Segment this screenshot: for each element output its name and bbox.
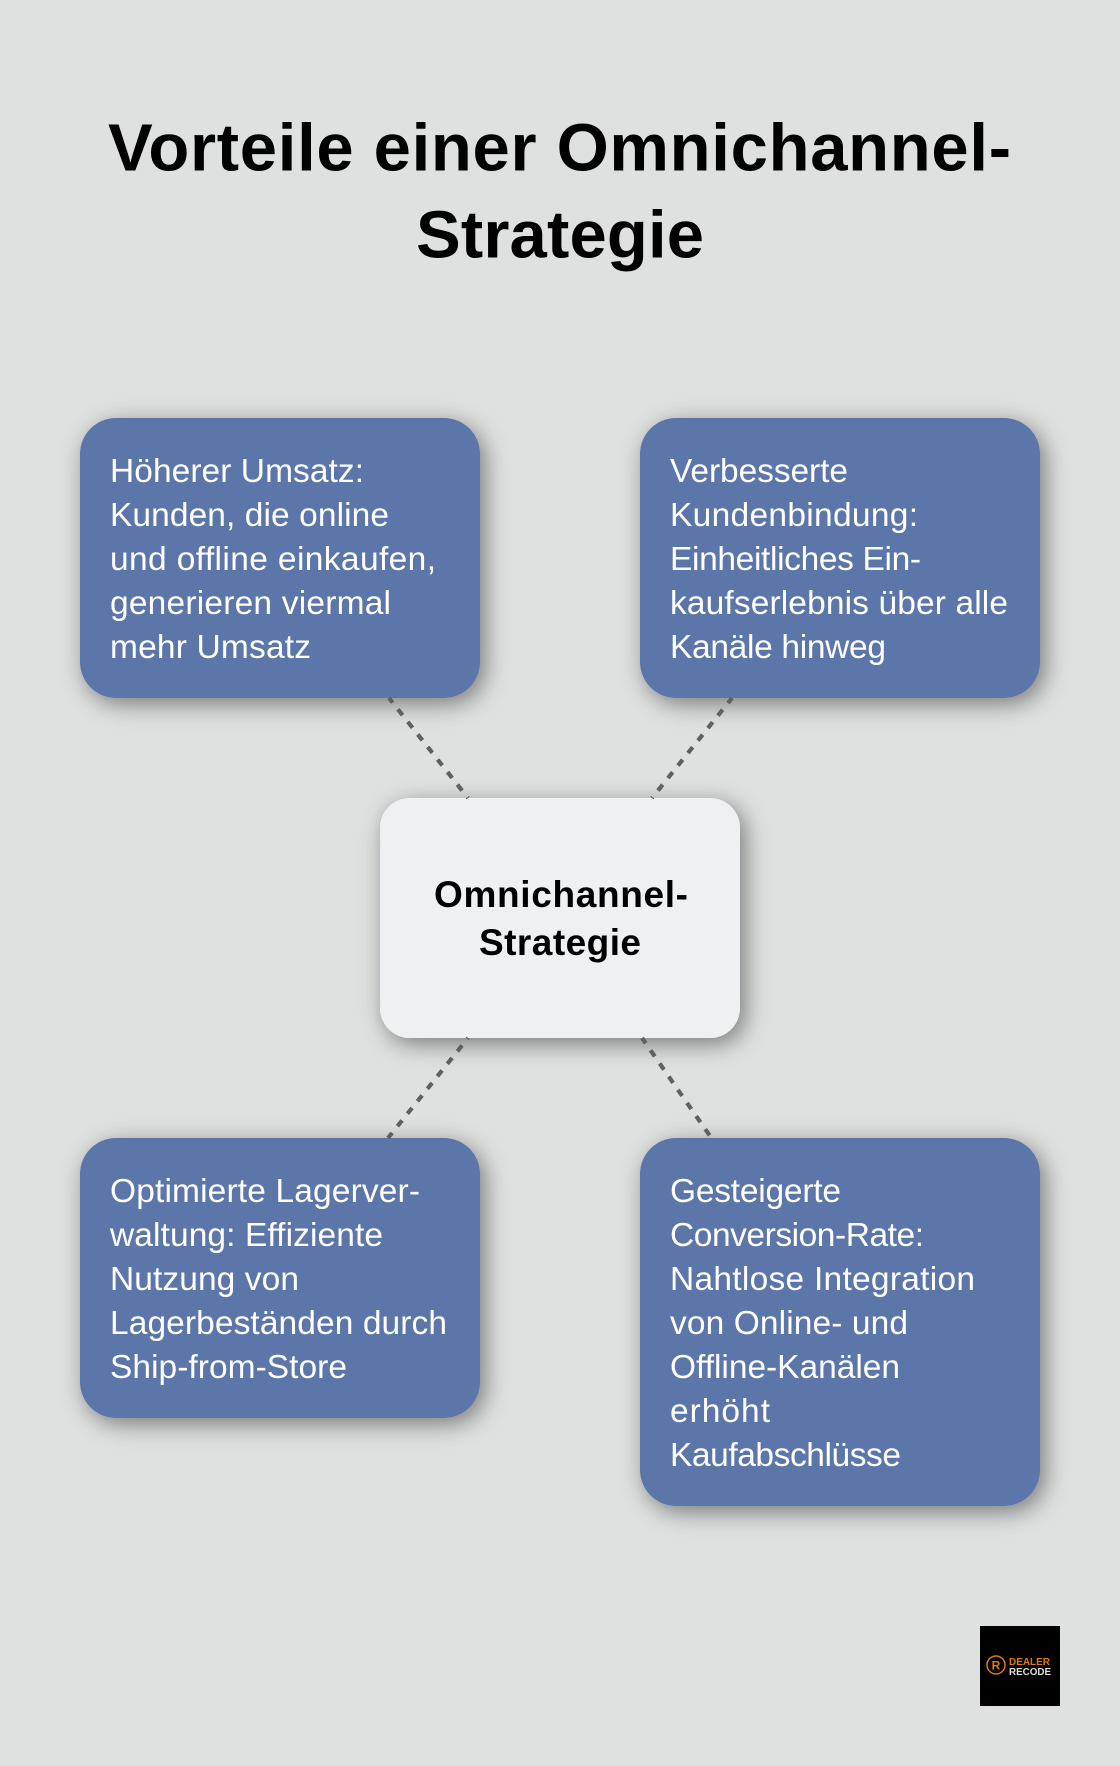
center label: Strategie xyxy=(479,922,641,963)
panel text: Höherer Umsatz xyxy=(110,453,436,666)
panel text: Optimierte Lagerverwaltung: waltung: Effiziente xyxy=(109,1217,383,1254)
panel text: Höherer Umsatz: und offline einkaufen, xyxy=(110,541,436,578)
panel text: Gesteigerte Conversion-Rate: erhöht xyxy=(670,1393,771,1430)
title: Strategie xyxy=(416,198,704,272)
panel text: Höherer Umsatz: Höherer Umsatz: xyxy=(110,453,364,490)
panel text: Optimierte Lagerverwaltung: Ship-from-Store xyxy=(110,1349,347,1386)
center label: Omnichannel- xyxy=(434,874,688,915)
panel text: Optimierte Lagerverwaltung: Nutzung von xyxy=(110,1261,299,1298)
panel text: Verbesserte Kundenbindung: kaufserlebnis über alle xyxy=(670,585,1008,622)
panel text: Höherer Umsatz: generieren viermal xyxy=(110,585,391,622)
panel text: Gesteigerte Conversion-Rate: Conversion-Rate: xyxy=(670,1217,924,1254)
logo wordmark xyxy=(1009,1656,1051,1678)
panel text: Optimierte Lagerverwaltung: Lagerbeständen durch xyxy=(110,1305,447,1342)
panel text: Verbesserte Kundenbindung: Einheitliches Ein- xyxy=(670,541,921,578)
panel text: Optimierte Lagerverwaltung: Optimierte Lagerver- xyxy=(110,1173,420,1210)
title xyxy=(108,110,1011,272)
panel text: Verbesserte Kundenbindung: Kanäle hinweg xyxy=(670,629,886,666)
panel text: Höherer Umsatz: mehr Umsatz xyxy=(110,629,311,666)
panel: center Omnichannel-Strategie xyxy=(380,798,740,1038)
panel text: Verbesserte Kundenbindung xyxy=(670,453,1008,666)
panel text: Gesteigerte Conversion-Rate: Nahtlose Integration xyxy=(670,1261,975,1298)
panel: Höherer Umsatz xyxy=(80,418,480,698)
icon: logo R: R xyxy=(992,1658,1001,1672)
logo: Dealer Recode xyxy=(980,1626,1060,1706)
panel text: Gesteigerte Conversion-Rate: Gesteigerte xyxy=(670,1173,841,1210)
panel text: Gesteigerte Conversion-Rate: Offline-Kanälen xyxy=(670,1349,900,1386)
logo wordmark: DEALER xyxy=(1009,1656,1050,1668)
panel text: Verbesserte Kundenbindung: Kundenbindung: xyxy=(670,497,918,534)
panel text: Gesteigerte Conversion-Rate xyxy=(670,1173,975,1474)
panel text: Verbesserte Kundenbindung: Verbesserte xyxy=(670,453,848,490)
connector lines xyxy=(388,698,732,1138)
panel: Gesteigerte Conversion-Rate xyxy=(640,1138,1040,1506)
title: Vorteile einer Omnichannel- xyxy=(108,110,1011,186)
center label xyxy=(434,874,688,963)
panel text: Optimierte Lagerverwaltung xyxy=(109,1173,447,1386)
logo wordmark: RECODE xyxy=(1009,1666,1051,1678)
panel text: Gesteigerte Conversion-Rate: von Online- und xyxy=(670,1305,908,1342)
panel: Optimierte Lagerverwaltung xyxy=(80,1138,480,1418)
panel text: Gesteigerte Conversion-Rate: Kaufabschlüsse xyxy=(670,1437,901,1474)
panel: Verbesserte Kundenbindung xyxy=(640,418,1040,698)
panel text: Höherer Umsatz: Kunden, die online xyxy=(110,497,389,534)
